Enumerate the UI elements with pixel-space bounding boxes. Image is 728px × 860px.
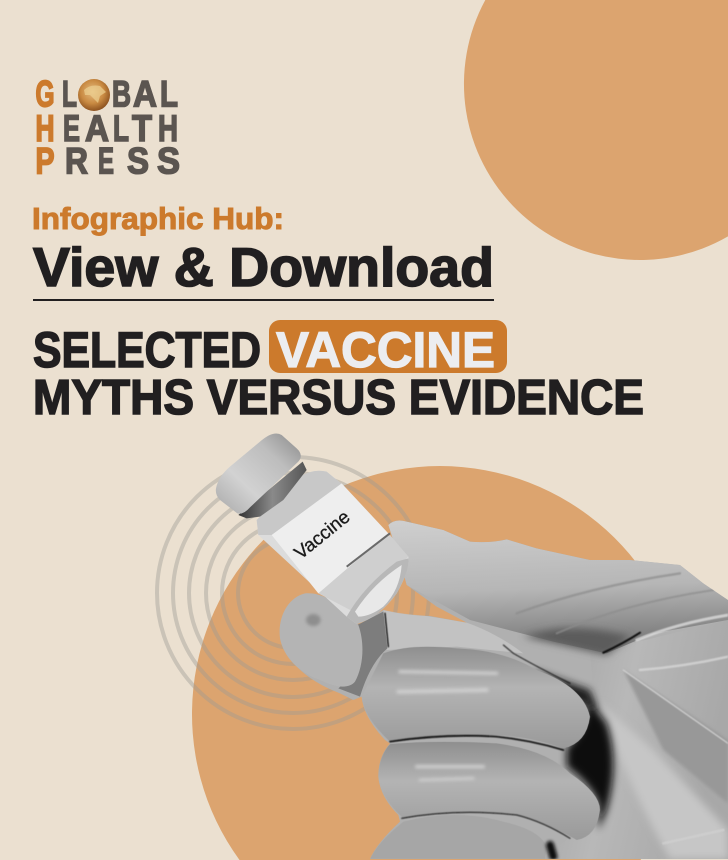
logo letters rest: R (65, 140, 88, 182)
palm light band (600, 703, 728, 859)
subtitle: Infographic Hub: (32, 201, 284, 236)
vaccine vial (216, 433, 409, 624)
finger three (370, 815, 547, 859)
logo letters rest: L (160, 74, 178, 114)
crease lines (517, 573, 728, 843)
lower finger stub (383, 610, 523, 653)
logo letters GHP: P (36, 140, 54, 182)
title line 2: MYTHS VERSUS EVIDENCE (33, 371, 644, 425)
icon: globe (78, 79, 110, 111)
vial base (347, 558, 409, 624)
liquid line (347, 533, 390, 567)
finger one (362, 647, 590, 748)
logo letters rest: E (63, 108, 80, 149)
title word: vaccine: VACCINE (276, 322, 495, 378)
hand tones clipped to silhouette (270, 510, 728, 859)
metal cap (216, 433, 301, 514)
logo letters GHP: G (36, 74, 54, 114)
logo letters rest: A (133, 74, 157, 114)
logo letters rest: A (85, 108, 109, 149)
concentric rings (157, 457, 429, 729)
gloved hand (270, 510, 728, 859)
title (33, 320, 644, 425)
highlight pill (269, 320, 507, 373)
bottom circle (192, 466, 688, 860)
finger shadow lines (385, 613, 640, 857)
logo letters rest: E (98, 140, 114, 182)
logo letters rest: L (62, 74, 77, 114)
finger highlights (398, 672, 497, 780)
label text: Vaccine (290, 506, 354, 563)
glass body (257, 471, 409, 624)
dark gap (567, 697, 613, 830)
thumb (280, 593, 362, 687)
palm panel (623, 670, 728, 803)
logo letters rest: S (157, 140, 180, 182)
liquid (318, 535, 408, 612)
logo letters rest (62, 74, 180, 182)
top right circle (464, 0, 728, 260)
title word: selected: SELECTED (33, 322, 261, 378)
finger two (378, 742, 600, 840)
thumb side (338, 612, 387, 697)
hand silhouette base (270, 510, 728, 859)
logo letters GHP: H (36, 108, 54, 149)
thumb print (306, 614, 321, 626)
heading: View & Download (33, 236, 494, 298)
logo letters GHP (36, 74, 54, 182)
crease shadow (533, 670, 597, 710)
logo letters rest: L (113, 108, 129, 149)
logo letters rest: T (132, 108, 152, 149)
palm (587, 676, 728, 859)
logo letters rest: H (158, 108, 178, 149)
logo letters rest: S (127, 140, 149, 182)
label (272, 483, 388, 593)
index shadow (523, 628, 630, 655)
logo letters rest: B (112, 74, 131, 114)
logo: Global Health Press (36, 74, 180, 182)
shoulder glass (257, 471, 342, 535)
index finger (388, 521, 728, 653)
neck (238, 462, 307, 518)
